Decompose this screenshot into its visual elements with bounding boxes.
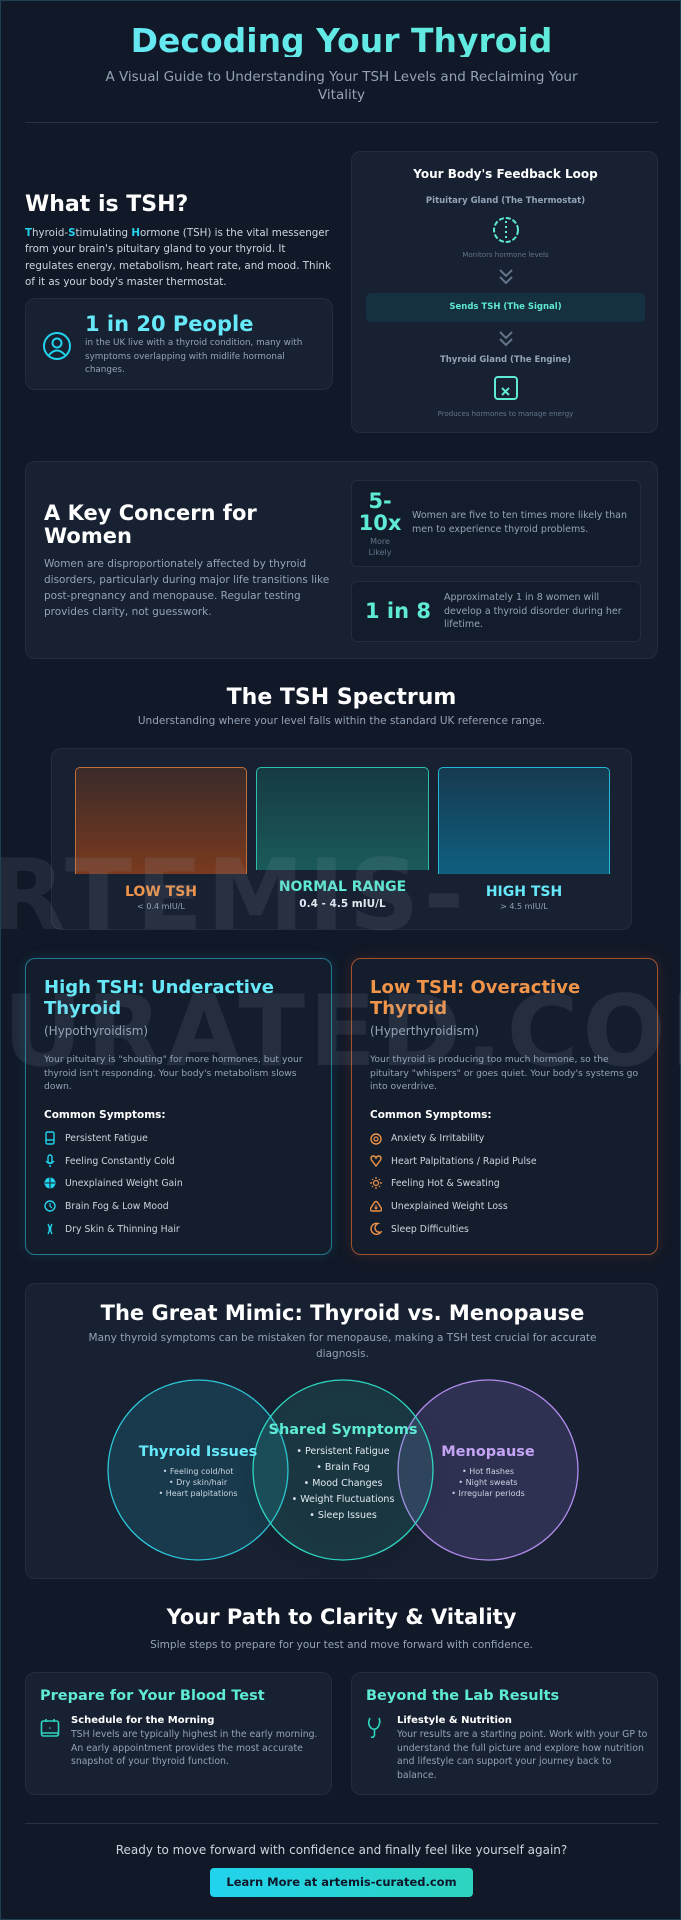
- label: normal: NORMAL RANGE: [279, 879, 406, 895]
- card: prepare for blood test: TSH levels are typically highest in the early morning. An early appointment provides the most accurate snapshot of your thyroid function.: [71, 1729, 317, 1767]
- card: high TSH underactive: (Hypothyroidism): [44, 1024, 148, 1038]
- icon: calendar: [40, 1719, 60, 1737]
- symptom list: Brain Fog & Low Mood: [65, 1201, 169, 1212]
- icon: person: [43, 332, 71, 360]
- card: high TSH underactive: Common Symptoms:: [44, 1109, 166, 1121]
- card: beyond lab results: Your results are a starting point. Work with your GP to understand the full picture and explore how nutrition and lifestyle can support your journey back to balance.: [397, 1729, 647, 1781]
- stat: 1 in 8: 1 in 8: [365, 599, 431, 623]
- symptom list: Feeling Constantly Cold: [65, 1156, 175, 1167]
- symptom list: Feeling Hot & Sweating: [391, 1178, 500, 1189]
- bar: high: [438, 767, 610, 874]
- bar: normal: [256, 767, 429, 870]
- venn diagram: • Irregular periods: [451, 1489, 525, 1498]
- card: low TSH overactive: Common Symptoms:: [370, 1109, 492, 1121]
- icon: thyroid: [494, 376, 518, 400]
- panel: key concern for women: [25, 461, 658, 659]
- label: thyroid: Thyroid Gland (The Engine): [440, 355, 571, 365]
- card: beyond lab results: [351, 1672, 658, 1795]
- heading: Your Body's Feedback Loop: [413, 167, 598, 181]
- venn diagram: • Mood Changes: [304, 1478, 382, 1489]
- symptom list: Anxiety & Irritability: [391, 1133, 484, 1144]
- card: high TSH underactive: High TSH: Underactive Thyroid: [44, 977, 274, 1019]
- icon: stethoscope: [368, 1718, 381, 1738]
- card: high TSH underactive: Your pituitary is "shouting" for more hormones, but your thyroid isn't responding. Your body's metabolism slows down.: [44, 1054, 303, 1092]
- CTA text: Ready to move forward with confidence and finally feel like yourself again?: [116, 1843, 567, 1857]
- signal bar: Sends TSH (The Signal): [449, 302, 562, 312]
- stat text: in the UK live with a thyroid condition, many with symptoms overlapping with midlife hormonal changes.: [85, 338, 302, 375]
- stat: 5-10x: Women are five to ten times more likely than men to experience thyroid problems.: [412, 510, 627, 535]
- venn diagram: [107, 1379, 579, 1561]
- label: pituitary: Pituitary Gland (The Thermostat): [426, 196, 585, 206]
- icon: brain: [493, 217, 519, 243]
- venn diagram: • Heart palpitations: [158, 1489, 238, 1498]
- symptom list: [44, 1131, 183, 1235]
- card: low TSH overactive: Low TSH: Overactive Thyroid: [370, 977, 580, 1019]
- panel: feedback loop: [351, 151, 658, 433]
- venn diagram: • Night sweats: [458, 1478, 518, 1487]
- arrow: [499, 331, 513, 346]
- card: low TSH overactive: [351, 958, 658, 1255]
- card: prepare for blood test: Schedule for the Morning: [71, 1715, 214, 1726]
- venn diagram: • Persistent Fatigue: [296, 1446, 390, 1457]
- caption: Monitors hormone levels: [462, 251, 549, 259]
- heading: TSH spectrum: The TSH Spectrum: [227, 685, 456, 710]
- heading: The Great Mimic: Thyroid vs. Menopause: [101, 1301, 584, 1325]
- heading: path to clarity: Your Path to Clarity & Vitality: [167, 1605, 516, 1629]
- caption: Produces hormones to manage energy: [438, 410, 573, 418]
- symptom list: Unexplained Weight Loss: [391, 1201, 508, 1212]
- symptom list: Heart Palpitations / Rapid Pulse: [391, 1156, 537, 1167]
- venn diagram: • Brain Fog: [316, 1462, 370, 1473]
- symptom list: Dry Skin & Thinning Hair: [65, 1224, 180, 1235]
- symptom list: Sleep Difficulties: [391, 1224, 469, 1235]
- card: prepare for blood test: Prepare for Your Blood Test: [40, 1688, 265, 1704]
- stat card: 1 in 20: [25, 298, 333, 390]
- symptom list: [370, 1133, 537, 1235]
- title: Decoding Your Thyroid: [131, 21, 552, 60]
- venn diagram: Shared Symptoms: [269, 1422, 417, 1438]
- venn diagram: • Weight Fluctuations: [292, 1494, 394, 1505]
- label: low: LOW TSH: [125, 884, 197, 900]
- symptom list: Persistent Fatigue: [65, 1133, 148, 1144]
- subtitle: Many thyroid symptoms can be mistaken for menopause, making a TSH test crucial for accurate diagnosis.: [89, 1332, 596, 1360]
- venn diagram: • Sleep Issues: [309, 1510, 377, 1521]
- subtitle: Simple steps to prepare for your test and move forward with confidence.: [150, 1639, 533, 1651]
- title: [1, 24, 681, 57]
- panel: spectrum: [51, 748, 632, 930]
- panel: spectrum: 0.4 - 4.5 mIU/L: [299, 898, 386, 910]
- text: Women are disproportionately affected by thyroid disorders, particularly during major life transitions like post-pregnancy and menopause. Regular testing provides clarity, not guesswork.: [44, 558, 329, 618]
- CTA button: Learn More at artemis-curated.com: [226, 1875, 457, 1889]
- label: high: HIGH TSH: [486, 884, 562, 900]
- venn diagram: • Feeling cold/hot: [163, 1467, 233, 1476]
- panel: spectrum: > 4.5 mIU/L: [500, 902, 548, 911]
- subtitle: Understanding where your level falls within the standard UK reference range.: [138, 715, 545, 727]
- panel: great mimic venn: [25, 1283, 658, 1579]
- panel: spectrum: < 0.4 mIU/L: [137, 902, 185, 911]
- heading: What is TSH: What is TSH?: [25, 192, 188, 217]
- card: high TSH underactive: [25, 958, 332, 1255]
- stat: 5-10x: [351, 480, 641, 567]
- stat: 5-10x: Likely: [369, 548, 391, 557]
- stat: 5-10x: 10x: [359, 511, 401, 535]
- heading: A Key Concern for Women: [44, 501, 257, 548]
- symptom list: Unexplained Weight Gain: [65, 1178, 183, 1189]
- venn diagram: • Hot flashes: [462, 1467, 514, 1476]
- venn diagram: • Dry skin/hair: [169, 1478, 228, 1487]
- stat: 1 in 8: [351, 581, 641, 642]
- venn diagram: Thyroid Issues: [139, 1444, 257, 1460]
- card: beyond lab results: Lifestyle & Nutrition: [397, 1715, 512, 1726]
- venn diagram: Menopause: [441, 1444, 535, 1460]
- text: TSH description: Thyroid-Stimulating Hormone (TSH) is the vital messenger from your brain's pituitary gland to your thyroid. It regulates energy, metabolism, heart rate, and mood. Think of it as your body's master thermostat.: [25, 227, 331, 288]
- signal bar: [366, 293, 645, 322]
- CTA button: [210, 1868, 473, 1897]
- stat number: 1 in 20 People: [85, 312, 253, 336]
- card: low TSH overactive: Your thyroid is producing too much hormone, so the pituitary "whispers" or goes quiet. Your body's systems go into overdrive.: [370, 1054, 638, 1092]
- subtitle: A Visual Guide to Understanding Your TSH Levels and Reclaiming Your Vitality: [105, 69, 578, 103]
- card: low TSH overactive: (Hyperthyroidism): [370, 1024, 479, 1038]
- card: prepare for blood test: [25, 1672, 332, 1795]
- stat: 5-10x: 5-: [368, 489, 392, 513]
- bar: low: [75, 767, 247, 874]
- stat: 5-10x: More: [370, 537, 390, 546]
- arrow: [499, 269, 513, 284]
- card: beyond lab results: Beyond the Lab Results: [366, 1688, 559, 1704]
- stat: 1 in 8: Approximately 1 in 8 women will develop a thyroid disorder during her lifetime.: [444, 592, 622, 630]
